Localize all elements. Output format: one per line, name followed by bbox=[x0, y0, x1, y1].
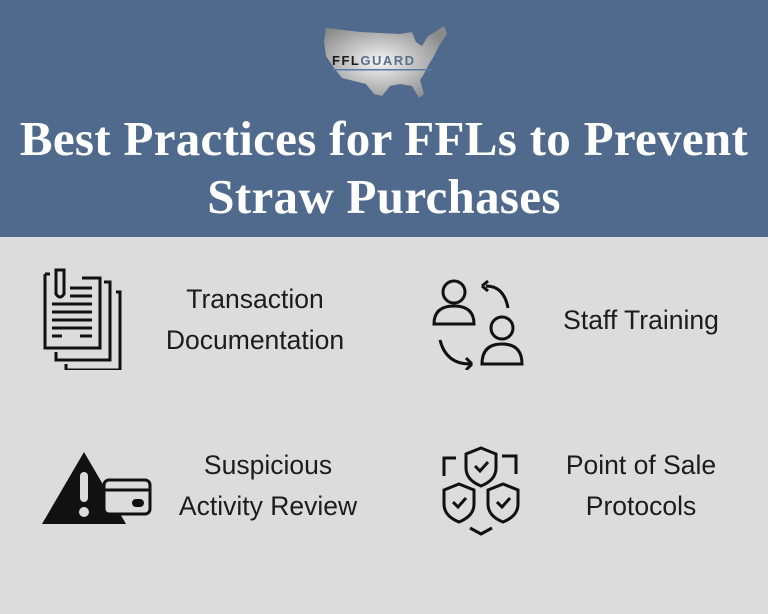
text: point of sale protocols: Point of Sale bbox=[566, 450, 716, 480]
text: point of sale protocols bbox=[566, 450, 716, 521]
text: staff training: Staff Training bbox=[563, 305, 719, 335]
text: transaction documentation bbox=[166, 284, 344, 355]
text: point of sale protocols: Protocols bbox=[586, 491, 696, 521]
icon: warning with card bbox=[42, 452, 152, 524]
title: Best Practices for FFLs to Prevent bbox=[20, 111, 748, 166]
title bbox=[20, 111, 748, 224]
logo bbox=[324, 26, 447, 98]
text: transaction documentation: Documentation bbox=[166, 325, 344, 355]
header band bbox=[0, 0, 768, 237]
text: suspicious activity review: Suspicious bbox=[204, 450, 332, 480]
title: Straw Purchases bbox=[207, 169, 561, 224]
icon: shields bbox=[442, 446, 520, 536]
logo: FFLGUARD bbox=[332, 53, 416, 68]
text: transaction documentation: Transaction bbox=[186, 284, 324, 314]
icon: staff training bbox=[432, 280, 524, 370]
text: suspicious activity review: Activity Review bbox=[179, 491, 357, 521]
text: suspicious activity review bbox=[179, 450, 358, 521]
icon: documents bbox=[44, 268, 122, 370]
